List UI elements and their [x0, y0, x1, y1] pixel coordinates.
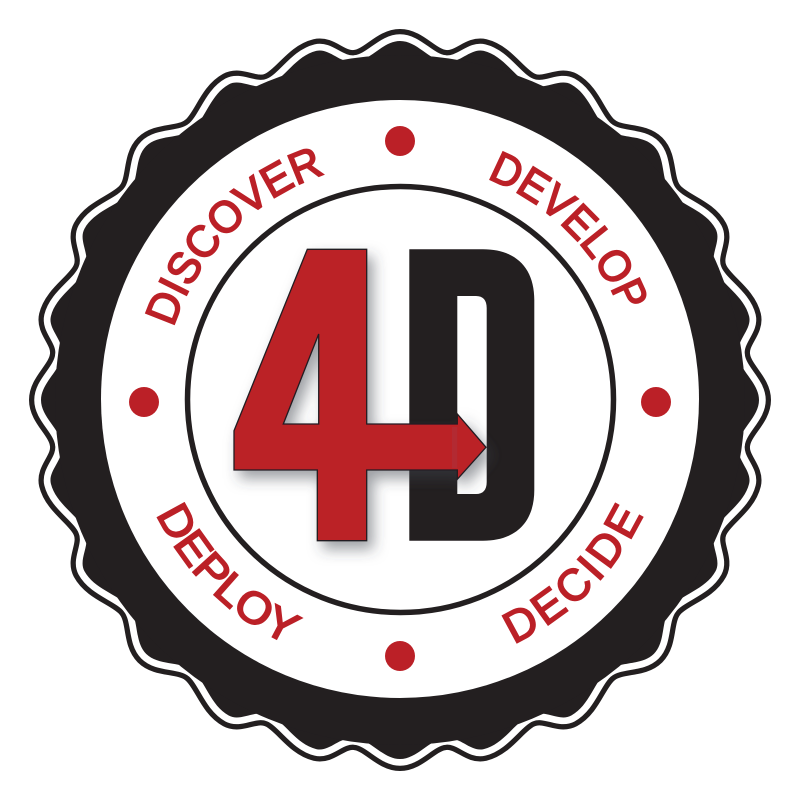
word: DECIDE: DECIDE [502, 502, 644, 644]
arrow joint shading [452, 427, 457, 468]
inner circle outline [188, 186, 614, 612]
dot: right [641, 387, 671, 417]
numeral 4 with arrow [234, 249, 486, 541]
dot: left [129, 387, 159, 417]
white text band [101, 100, 699, 698]
word: DEPLOY: DEPLOY [156, 502, 304, 640]
black body core [55, 55, 745, 745]
dot: top [385, 126, 415, 156]
dot: bottom [385, 641, 415, 671]
word: DISCOVER: DISCOVER [144, 148, 325, 326]
letter D [409, 249, 534, 541]
word: DEVELOP: DEVELOP [489, 150, 646, 304]
